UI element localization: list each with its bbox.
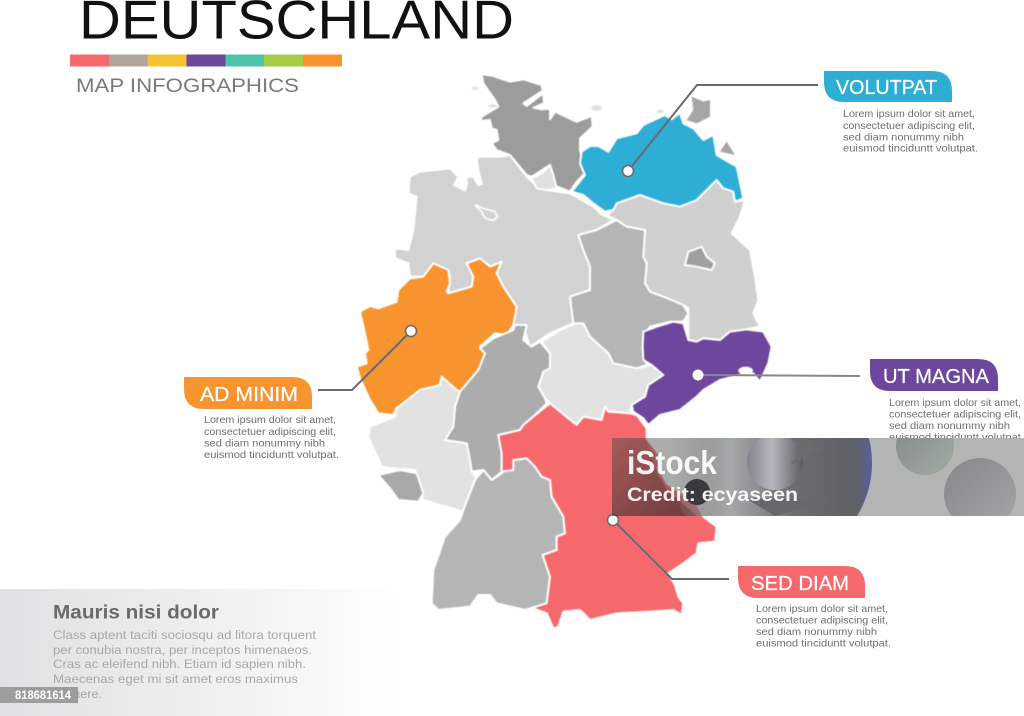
tag label: UT MAGNA — [883, 366, 990, 388]
Saxony white notch — [738, 367, 753, 375]
body text: euismod tinciduntt volutpat. — [204, 450, 339, 461]
body text: Lorem ipsum dolor sit amet, — [843, 109, 975, 120]
iStock logo text: iStock — [627, 444, 718, 481]
state: Baden-Wuerttemberg — [432, 458, 565, 610]
state: Saxony — [632, 322, 772, 425]
body text: Lorem ipsum dolor sit amet, — [756, 604, 888, 615]
body text — [756, 604, 891, 650]
state: Bavaria — [498, 403, 717, 628]
colour legend bar — [70, 54, 342, 66]
body text: euismod tinciduntt volutpat. — [756, 638, 891, 650]
subtitle: MAP INFOGRAPHICS — [76, 75, 299, 97]
callout: Sed Diam — [608, 514, 891, 650]
body text: Lorem ipsum dolor sit amet, — [204, 415, 336, 426]
state: Saxony-Anhalt — [570, 220, 688, 368]
tag — [824, 71, 952, 102]
note text: posuere. — [53, 687, 102, 701]
tag label: VOLUTPAT — [836, 77, 937, 99]
note text: Maecenas eget mi sit amet eros maximus — [53, 672, 298, 686]
state: Schleswig-Holstein — [481, 74, 593, 192]
body text: Lorem ipsum dolor sit amet, — [889, 398, 1021, 409]
state: Hamburg — [532, 165, 557, 190]
lake: Steinhuder Meer — [475, 205, 498, 221]
leader line — [698, 375, 860, 376]
callout: Ut Magna — [692, 359, 1024, 444]
state: Berlin — [685, 247, 715, 270]
islands — [472, 87, 664, 113]
note text — [53, 628, 317, 701]
state: Saarland — [378, 470, 423, 502]
state: Mecklenburg-Vorpommern — [572, 113, 743, 212]
state: Thuringia — [538, 323, 663, 425]
body text: consectetuer adipiscing elit, — [843, 121, 975, 132]
tag label: AD MINIM — [200, 384, 298, 406]
body text: euismod tinciduntt volutpat. — [843, 144, 978, 154]
image id badge: 818681614 — [15, 690, 72, 702]
tag label: SED DIAM — [751, 573, 849, 595]
state: Hesse — [445, 325, 550, 480]
southern states — [368, 322, 772, 628]
tag — [738, 566, 865, 598]
island: Usedom — [720, 142, 735, 155]
state: Brandenburg — [607, 180, 760, 343]
marker dot — [608, 514, 618, 526]
callout: Ad Minim — [184, 326, 416, 461]
banner artwork — [612, 438, 1024, 516]
body text: sed diam nonummy nibh — [843, 132, 964, 144]
body text — [204, 415, 339, 461]
note text: Class aptent taciti sociosqu ad litora torquent — [53, 628, 317, 642]
note heading: Mauris nisi dolor — [53, 602, 220, 624]
state: North Rhine-Westphalia — [357, 258, 517, 415]
body text — [889, 398, 1024, 444]
island: Ruegen — [687, 97, 710, 123]
body text: sed diam nonummy nibh — [889, 421, 1010, 432]
panel: bottom note background — [0, 589, 400, 716]
map of Germany — [357, 74, 772, 628]
northern states — [357, 74, 760, 415]
leader line — [318, 331, 411, 390]
body text: consectetuer adipiscing elit, — [889, 410, 1021, 420]
body text: consectetuer adipiscing elit, — [204, 427, 336, 438]
note text: Cras ac eleifend nibh. Etiam id sapien nibh. — [53, 657, 306, 671]
leader line — [628, 85, 818, 171]
state: Rhineland-Palatinate — [368, 377, 476, 512]
image id badge — [0, 687, 78, 703]
body text: sed diam nonummy nibh — [204, 438, 325, 450]
leader line — [613, 520, 729, 579]
state: Lower Saxony — [395, 155, 613, 347]
marker dot — [406, 326, 416, 336]
callout: Volutpat — [622, 71, 978, 176]
marker dot — [692, 370, 704, 380]
body text: sed diam nonummy nibh — [756, 627, 877, 638]
note text: per conubia nostra, per inceptos himenaeos. — [53, 643, 312, 657]
tag — [184, 377, 312, 409]
watermark banner — [612, 438, 1024, 516]
marker dot — [622, 166, 634, 176]
credit text: Credit: ecyaseen — [627, 485, 798, 506]
body text: euismod tinciduntt volutpat. — [889, 432, 1024, 444]
tag — [870, 359, 998, 391]
body text — [843, 109, 978, 154]
body text: consectetuer adipiscing elit, — [756, 616, 888, 626]
